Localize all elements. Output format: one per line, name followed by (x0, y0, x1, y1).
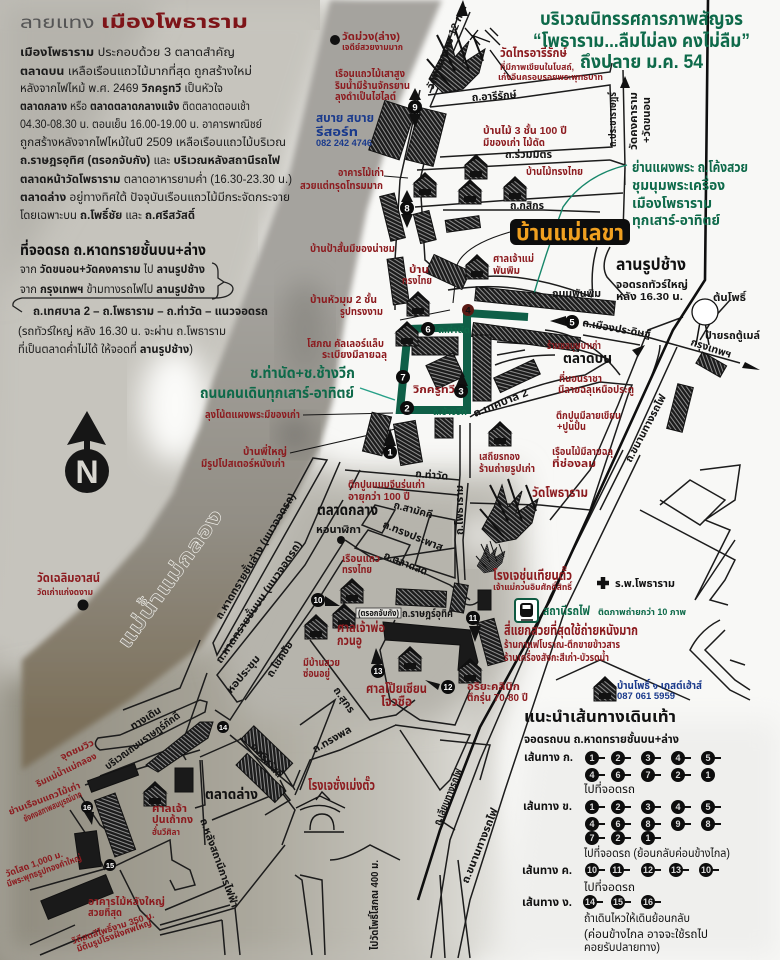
marker 13 (371, 648, 385, 678)
marker 15 (104, 859, 116, 871)
icon: railway station with label: สถานีรถไฟ (543, 604, 590, 618)
marker 8 (400, 190, 414, 228)
street names: ตลาดบน (563, 350, 612, 366)
walking street callout (green): ถนนคนเดินทุกเสาร์-อาทิตย์ (200, 385, 354, 402)
red place labels: central part: ลุงโน้ตแผงพระมีของเก่า (205, 408, 300, 421)
red place labels: north part: สวยแต่ทรุดโทรมมาก (300, 179, 383, 192)
parking directions: จาก กรุงเทพฯ ข้ามทางรถไฟไป ลานรูปช้าง (20, 282, 205, 297)
direction arrows on roads (456, 0, 760, 370)
route C: 13 (671, 865, 681, 875)
red place labels: south part: ร้านกาแฟโบราณ-ตึกขายข้าวสาร (504, 638, 620, 651)
route C: 12 (643, 865, 653, 875)
red place labels: southwest: ศาลเจ้า (152, 802, 187, 815)
panel: intro text (13, 12, 292, 357)
red place labels: north part: มีของเก่า ไม้ดัด (483, 136, 545, 149)
route B: ไปที่จอดรถ (ย้อนกลับค่อนข้างไกล) (583, 845, 730, 860)
street names: ถ.ตลาดสด (382, 550, 429, 578)
guide heading: แนะนำเส้นทางเดินเท้า (524, 708, 676, 726)
route C: เส้นทาง ค. (522, 863, 572, 877)
marker 7 (396, 370, 410, 384)
red place labels: southwest: มีต้นรูปโรงฝังศพใหญ่ (75, 917, 153, 954)
red place labels: south part: มีบ้านสวย (303, 656, 340, 669)
red place labels: north part: โสภณ คัลเลอร์แล็บ (307, 338, 384, 350)
street names: ถ.ร่วมมิตร (505, 148, 553, 161)
marker 15: 15 (106, 861, 114, 870)
route B: 1 (645, 833, 651, 843)
railway line (418, 0, 708, 900)
red place labels: north part: วัดม่วง(ล่าง) (342, 30, 400, 43)
red place labels: southwest: ยังคงสภาพสมบูรณ์มาก (22, 789, 83, 824)
parking directions (18, 262, 268, 357)
red place labels: central part: วิกครูทวี (413, 384, 455, 396)
street names: (ตรอกจับกัง) (358, 608, 399, 618)
marker 9 (408, 88, 422, 128)
street names: ถ.เมืองประดิษฐ์ (581, 317, 652, 341)
red place labels: north part (300, 30, 603, 361)
palm trees (465, 28, 512, 80)
marker 14 (217, 721, 229, 733)
body: three markets: ตลาดหน้าวัดโพธาราม ตลาดอาหารยามค่ำ (16.30-23.30 น.) (20, 171, 292, 186)
place: Wat Chaloem Art: วัดเฉลิมอาสน์ (37, 571, 100, 585)
marker 2: 2 (404, 404, 410, 414)
marker 3 (454, 372, 468, 398)
body: three markets: 04.30-08.30 น. ตอนเย็น 16.00-19.00 น. อาคารพาณิชย์ (20, 117, 262, 131)
red place labels: south part: ซ่อนอยู่ (303, 667, 330, 680)
body: three markets: ตลาดบน เหลือเรือนแถวไม้มากที่สุด ถูกสร้างใหม่ (20, 63, 252, 78)
temple: Song Meng Tue shrine (296, 792, 345, 832)
route A (524, 750, 721, 796)
street names: ถ.สุกร (331, 685, 357, 716)
red place labels: southwest: ปุนเถ้ากง (152, 813, 193, 826)
route A: เส้นทาง ก. (524, 750, 573, 764)
route A: 4 (589, 770, 595, 780)
route B: 8 (645, 819, 651, 829)
place: Lan Rup Chang parking (616, 255, 688, 303)
marker 10 (311, 593, 340, 607)
red place labels: south part: เจ้าแม่กวนอิมศักดิ์สิทธิ์ (493, 581, 573, 592)
marker 5: 5 (569, 318, 575, 328)
parking directions: จาก วัดขนอน+วัดคงคาราม ไป ลานรูปช้าง (20, 262, 205, 277)
route A: 5 (705, 753, 711, 763)
place: Lan Rup Chang parking: หลัง 16.30 น. (616, 291, 683, 303)
route C: ไปที่จอดรถ (583, 879, 635, 894)
leader lines (290, 165, 627, 453)
street names: ทางเดิน (128, 704, 163, 733)
red place labels: central part: +ปูนปั้น (557, 419, 586, 433)
body: three markets: โดยเฉพาะบน ถ.โพธิ์ชัย และ ถ.ศรีสวัสดิ์ (20, 208, 196, 222)
panel: walking routes guide (522, 708, 730, 954)
street names: ถ.ขนานทางรถไฟ (623, 392, 669, 464)
body: three markets: ตลาดกลาง หรือ ตลาดตลาดกลางแจ้ง ติดตลาดตอนเช้า (20, 99, 250, 113)
red place labels: southwest: ย่านเรือนแถวไม้เก่า (7, 779, 82, 817)
red place labels: central part: ที่นอนราชา (559, 371, 602, 385)
route D: 14 (585, 897, 595, 907)
street names: ถ.กสิกร (510, 200, 545, 212)
route C: 10 (587, 865, 597, 875)
route B: เส้นทาง ข. (523, 799, 572, 813)
red place labels: north part: บ้านไม้ 3 ชั้น 100 ปี (483, 123, 567, 137)
red place labels: southwest: วิถีสดสีโพธิ์งาม 350 ม. (70, 908, 155, 946)
walking street callout (green): ช.ท่านัด+ช.ช้างวีก (250, 364, 355, 382)
red place labels: south part: สี่แยกสวยที่สุดใช้ถ่ายหนังมาก (504, 620, 638, 639)
red place labels: southwest: ริมแม่น้ำแม่กลอง (33, 749, 98, 789)
small houses and shrines (142, 154, 618, 806)
route C: 11 (612, 865, 622, 875)
route D: 16 (643, 897, 653, 907)
street names: ป้ายรถตู้เมล์ (705, 329, 760, 342)
street names: ถ.เลียบทางรถไฟ (432, 767, 465, 827)
walking route highlight (green loop) (400, 313, 528, 410)
place: Lan Rup Chang parking: จอดรถทัวร์ใหญ่ (616, 278, 688, 291)
teal leader: amulet market (530, 165, 627, 307)
red place labels: southwest: อาคารไม้หลังใหญ่ (88, 895, 165, 908)
red place labels: south part: โรงเจชุ่นเทียนตั๊ว (493, 565, 572, 584)
red place labels: south part: โจวซือ (381, 694, 412, 709)
river label: แม่น้ำแม่กลอง (110, 503, 228, 653)
amulet market callout (green): ชุมนุมพระเครื่อง (632, 175, 725, 194)
street names: ถ.ท่านัด (438, 323, 470, 336)
street names: ถ.หลังสถานีการไฟฟ้า (197, 817, 241, 909)
street names: ถ.ศรีสวัสดิ์ (248, 740, 286, 781)
amulet market callout (green): ทุกเสาร์-อาทิตย์ (632, 212, 720, 229)
icon: railway station with label (515, 599, 686, 622)
marker 16 (81, 801, 94, 825)
street names: ถ.ทรงพล (310, 724, 354, 756)
red place labels: central part: ตึกปูนแบบจีนรุ่นเก่า (348, 478, 425, 491)
title: ลายแทง เมืองโพธาราม (20, 12, 248, 33)
marker 7: 7 (400, 372, 406, 384)
red place labels: south part: กวนอู (337, 633, 362, 649)
icon: railway station with label: ติดภาพถ่ายกว่า 10 ภาพ (598, 606, 686, 617)
red place labels: north part: เรือนแถวไม้เสาสูง (335, 67, 405, 80)
marker 8: 8 (404, 204, 410, 214)
street names: ตลาดกลาง (317, 502, 378, 519)
marker 11: 11 (469, 614, 478, 623)
red place labels: central part: อายุกว่า 100 ปี (348, 490, 410, 503)
street names: +วัดขนอน (641, 97, 653, 143)
route D: (ค่อนข้างไกล อาจจะใช้รถไป (584, 927, 708, 941)
body: three markets: เมืองโพธาราม ประกอบด้วย 3 ตลาดสำคัญ (20, 45, 235, 59)
route A: 3 (645, 753, 651, 763)
red place labels: north part: วัดไทรอารีรักษ์ (500, 46, 567, 60)
resort label (blue): สบาย สบาย (316, 111, 374, 125)
street names: ถ.ท่าวัด (415, 467, 449, 483)
street names: ถ.ประชาราษฎร์ (607, 92, 619, 147)
red place labels: central part: ตึกปูนมีลายเขียน (556, 410, 621, 422)
route A: 7 (645, 770, 651, 780)
street names: ถ.โชคชัย (264, 639, 296, 680)
place: Wat Chaloem Art: วัดเก่าแก่งดงาม (37, 586, 93, 597)
callout: Ban Mae Lekha: บ้านแม่เลขา (516, 220, 624, 245)
red place labels: central part: มีรูปโปสเตอร์หนังเก่า (201, 457, 285, 470)
red place labels: north part: ริมน้ำมีร้านจักรยาน (335, 78, 410, 92)
parking note: จอดรถบน ถ.หาดทรายชั้นบน+ล่าง (524, 731, 679, 746)
red place labels: north part: เจดีย์สวยงามมาก (342, 42, 403, 52)
marker 13: 13 (374, 667, 383, 676)
icon: north arrow (65, 411, 109, 493)
route B: 5 (705, 802, 711, 812)
body: three markets: ตลาดล่าง อยู่ทางทิศใต้ ปัจจุบันเรือนแถวไม้มีกระจัดกระจาย (20, 190, 290, 204)
marker 11 (466, 611, 481, 642)
amulet market callout (green): เมืองโพธาราม (632, 195, 712, 211)
marker 12 (425, 680, 455, 694)
route A: 4 (675, 753, 681, 763)
marker 5 (565, 315, 579, 329)
body: three markets: หลังจากไฟไหม้ พ.ศ. 2469 วิกครูทวี เป็นหัวใจ (20, 81, 223, 96)
parking directions: ที่เป็นตลาดค่ำไม่ได้ ให้จอดที่ ลานรูปช้าง) (18, 341, 193, 357)
red place labels: southwest: สวยที่สุด (88, 905, 122, 919)
marker 6 (421, 322, 435, 336)
street names: ถ.อารีรักษ์ (471, 89, 517, 104)
street names: ถ.ราษฎร์อุทิศ (402, 608, 453, 620)
red place labels: central part: เสถียรทอง (479, 451, 520, 463)
red place labels: north part: บ้านป้าสั้นมีของน่าชม (310, 241, 395, 255)
red place labels: southwest (4, 737, 193, 954)
red place labels: north part: ลุงดำเป็นไฮไลต์ (335, 91, 396, 103)
marker 2 (400, 401, 414, 415)
street names: ถ.หาดทรายชั้นล่าง (แนวจอดรถ) (212, 490, 298, 622)
body: three markets (20, 45, 292, 222)
exhibition heading (green): “โพธาราม...ลืมไม่ลง คงไม่ลืม” (533, 30, 750, 52)
red place labels: central part: ร้านถ่ายรูปเก่า (479, 462, 535, 475)
street names: วัดคงคาราม (628, 92, 640, 150)
marker 3: 3 (458, 386, 464, 398)
street names: ถ.หาดทรายชั้นบน (แนวจอดรถ) (212, 538, 305, 666)
parking heading: ที่จอดรถ ถ.หาดทรายชั้นบน+ล่าง (20, 239, 206, 259)
red place labels: south part: ศาลเจ้าพ่อ (337, 620, 385, 635)
street names: ถ.โพธาราม (454, 485, 466, 535)
route A: 6 (615, 770, 621, 780)
river: Mae Klong (22, 0, 442, 770)
route B: 2 (615, 833, 621, 843)
red place labels: south part (303, 553, 638, 793)
route A: 1 (705, 770, 711, 780)
red place labels: south part: อริยะคลินิก (467, 681, 520, 693)
red place labels: central part: ที่ช่องลม (552, 456, 596, 470)
street names: ตลาดล่าง (205, 786, 258, 802)
red place labels: north part: ระเบียงมีลายฉลุ (322, 349, 387, 361)
route B: 1 (589, 802, 595, 812)
exhibition heading (green): บริเวณนิทรรศการภาพสัญจร (540, 9, 743, 30)
place: Wat Chaloem Art (37, 571, 100, 610)
street names: ต้นโพธิ์ (713, 291, 747, 304)
red place labels: north part: เก๋งจีนครอบรอยพระพุทธบาท (498, 72, 603, 82)
route D: เส้นทาง ง. (522, 895, 572, 909)
icon: north arrow: N (75, 454, 99, 490)
marker 14: 14 (219, 723, 228, 732)
street names: หอนาฬิกา (316, 524, 361, 536)
route D: คอยรับปลายทาง) (584, 941, 660, 954)
route A: 2 (615, 753, 621, 763)
icon: hospital cross with label: ร.พ.โพธาราม (615, 578, 675, 590)
resort label (blue): รีสอร์ท (315, 125, 358, 139)
body: three markets: ถูกสร้างหลังจากไฟไหม้ในปี 2509 เหลือเรือนแถวไม้บริเวณ (20, 135, 286, 149)
red place labels: north part: บ้านไม้ทรงไทย (526, 165, 583, 178)
red place labels: north part: ที่มีภาพเขียนในโบสถ์, (500, 60, 574, 72)
route B: 6 (615, 819, 621, 829)
body: three markets: ถ.ราษฎรอุทิศ (ตรอกจับกัง) และ บริเวณหลังสถานีรถไฟ (20, 154, 281, 167)
guesthouse label (blue): 087 061 5959 (617, 691, 675, 702)
street names: กรุงเทพฯ (689, 336, 733, 361)
street names: วัดคงคาราม 12 กม. (425, 3, 470, 91)
resort label (blue): 082 242 4746 (316, 138, 372, 148)
red place labels: south part: ทรงไทย (342, 564, 372, 576)
map route markers (81, 88, 579, 871)
red place labels: north part: บ้านหัวมุม 2 ชั้น (310, 292, 377, 306)
red place labels: south part: ศาลโป๊ยเซียน (366, 681, 427, 696)
marker 4: 4 (465, 306, 471, 316)
route D (522, 895, 708, 954)
red place labels: north part: ศาลเจ้าแม่ (493, 252, 534, 265)
brace and connector arrow (13, 263, 233, 312)
marker 1: 1 (387, 448, 393, 458)
street names: ไปวัดโพธิ์โสภณ 400 ม. (368, 860, 381, 950)
route B: 2 (615, 802, 621, 812)
shrine: Chun Thian Tue (476, 541, 505, 573)
red place labels: north part: ทรงไทย (402, 275, 432, 287)
red place labels: north part: รูปทรงงาม (340, 306, 383, 318)
red place labels: southwest: มีพระพุทธรูปทองคำใหญ่ (5, 852, 83, 889)
street names: ถ.เทศบาล 2 (472, 387, 530, 420)
street names: ถ.ขนานทางรถไฟ (460, 806, 501, 885)
red place labels: south part: ร้านเครื่องสังกะสีเก่า-บัวรดน้ำ (504, 650, 609, 664)
exhibition heading (green): ถึงปลาย ม.ค. 54 (580, 52, 703, 73)
red place labels: southwest: จุดชมวิว (59, 737, 96, 762)
route C (522, 863, 719, 894)
street names: บริเวณถนนราษฎร์ภักดี (103, 710, 183, 772)
marker 6: 6 (425, 324, 431, 336)
marker 9: 9 (412, 102, 418, 114)
resort label (blue) (315, 111, 374, 148)
red place labels: southwest: ฮั่นวีศิลา (152, 825, 180, 837)
route A: ไปที่จอดรถ (583, 781, 635, 796)
street names: หอประชุม (224, 653, 263, 696)
red place labels: central part: ร้านชลบุษบาเก่า (547, 339, 601, 352)
route B: 7 (589, 833, 595, 843)
marker 16: 16 (83, 803, 91, 812)
amulet market callout (green) (632, 159, 748, 229)
red place labels: central part: วัดโพธาราม (532, 485, 588, 500)
guesthouse label (blue) (617, 679, 702, 702)
street names: ถ.ช้างวีก (433, 405, 467, 418)
red place labels: north part: พันพิม (493, 265, 520, 277)
red place labels: south part: เรือนแถว (342, 553, 380, 565)
street names: ถ.สามัคคี (392, 499, 434, 521)
tree: Bodhi (692, 299, 718, 345)
route D: ถ้าเดินไหวให้เดินย้อนกลับ (584, 911, 690, 925)
marker 1 (383, 428, 397, 459)
red place labels: central part: เรือนไม้มีลายฉลุ (552, 445, 613, 458)
guesthouse label (blue): บ้านโพธิ์ ๑ เกสต์เฮ้าส์ (617, 679, 702, 692)
place: Lan Rup Chang parking: ลานรูปช้าง (616, 255, 686, 275)
route A: 1 (589, 753, 595, 763)
route B: 9 (675, 819, 681, 829)
walking street callout (green) (200, 364, 395, 402)
red place labels: north part: อาคารไม้เก่า (338, 166, 384, 179)
exhibition heading (green) (533, 9, 750, 73)
buildings: hatched row houses (41, 100, 727, 919)
parking directions: (รถทัวร์ใหญ่ หลัง 16.30 น. จะผ่าน ถ.โพธาราม (18, 324, 226, 338)
route B: 8 (705, 819, 711, 829)
route B: 4 (589, 819, 595, 829)
route D: 15 (613, 897, 623, 907)
route C: 10 (701, 865, 711, 875)
street names: ถนนพันพิม (552, 288, 601, 300)
marker 10: 10 (314, 596, 323, 605)
red place labels: central part (201, 339, 634, 503)
route B (523, 799, 730, 860)
marker 4 (462, 304, 474, 316)
street names: ถ.ทรงประพาส (381, 519, 445, 554)
route B: 4 (675, 802, 681, 812)
red place labels: south part: โรงเจซั่งเม่งตั๊ว (308, 775, 375, 793)
red place labels: southwest: วัดโสด 1,000 ม. (4, 849, 64, 879)
red place labels: south part: ตึกรุ่น 70-80 ปี (467, 691, 528, 704)
parking directions: ถ.เทศบาล 2 – ถ.โพธาราม – ถ.ท่าวัด – แนวจอดรถ (33, 304, 268, 318)
temple: Wat Sai Aree Rak (427, 29, 485, 93)
amulet market callout (green): ย่านแผงพระ ถ.โค้งสวย (632, 159, 748, 175)
marker 12: 12 (444, 683, 453, 692)
route A: 2 (675, 770, 681, 780)
route B: 3 (645, 802, 651, 812)
red place labels: central part: บ้านพี่ใหญ่ (243, 444, 287, 458)
temple: Wat Photharam (480, 479, 538, 543)
red place labels: north part: บ้าน (409, 263, 429, 276)
red place labels: central part: มีลายฉลุเหนือประตู (558, 384, 634, 396)
